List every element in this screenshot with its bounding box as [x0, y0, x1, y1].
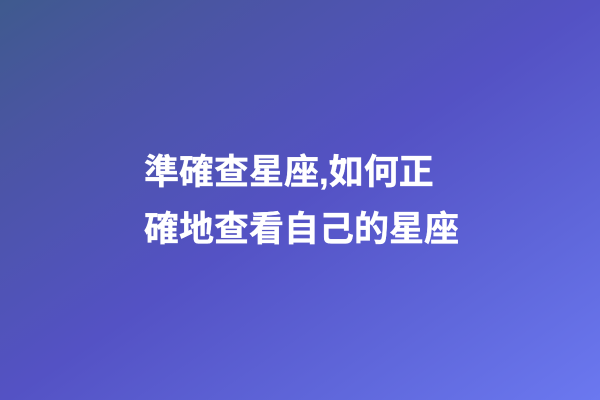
title line 1: 準確查星座,如何正 — [144, 153, 434, 192]
title — [144, 153, 459, 249]
title line 2: 確地查看自己的星座 — [144, 210, 459, 249]
